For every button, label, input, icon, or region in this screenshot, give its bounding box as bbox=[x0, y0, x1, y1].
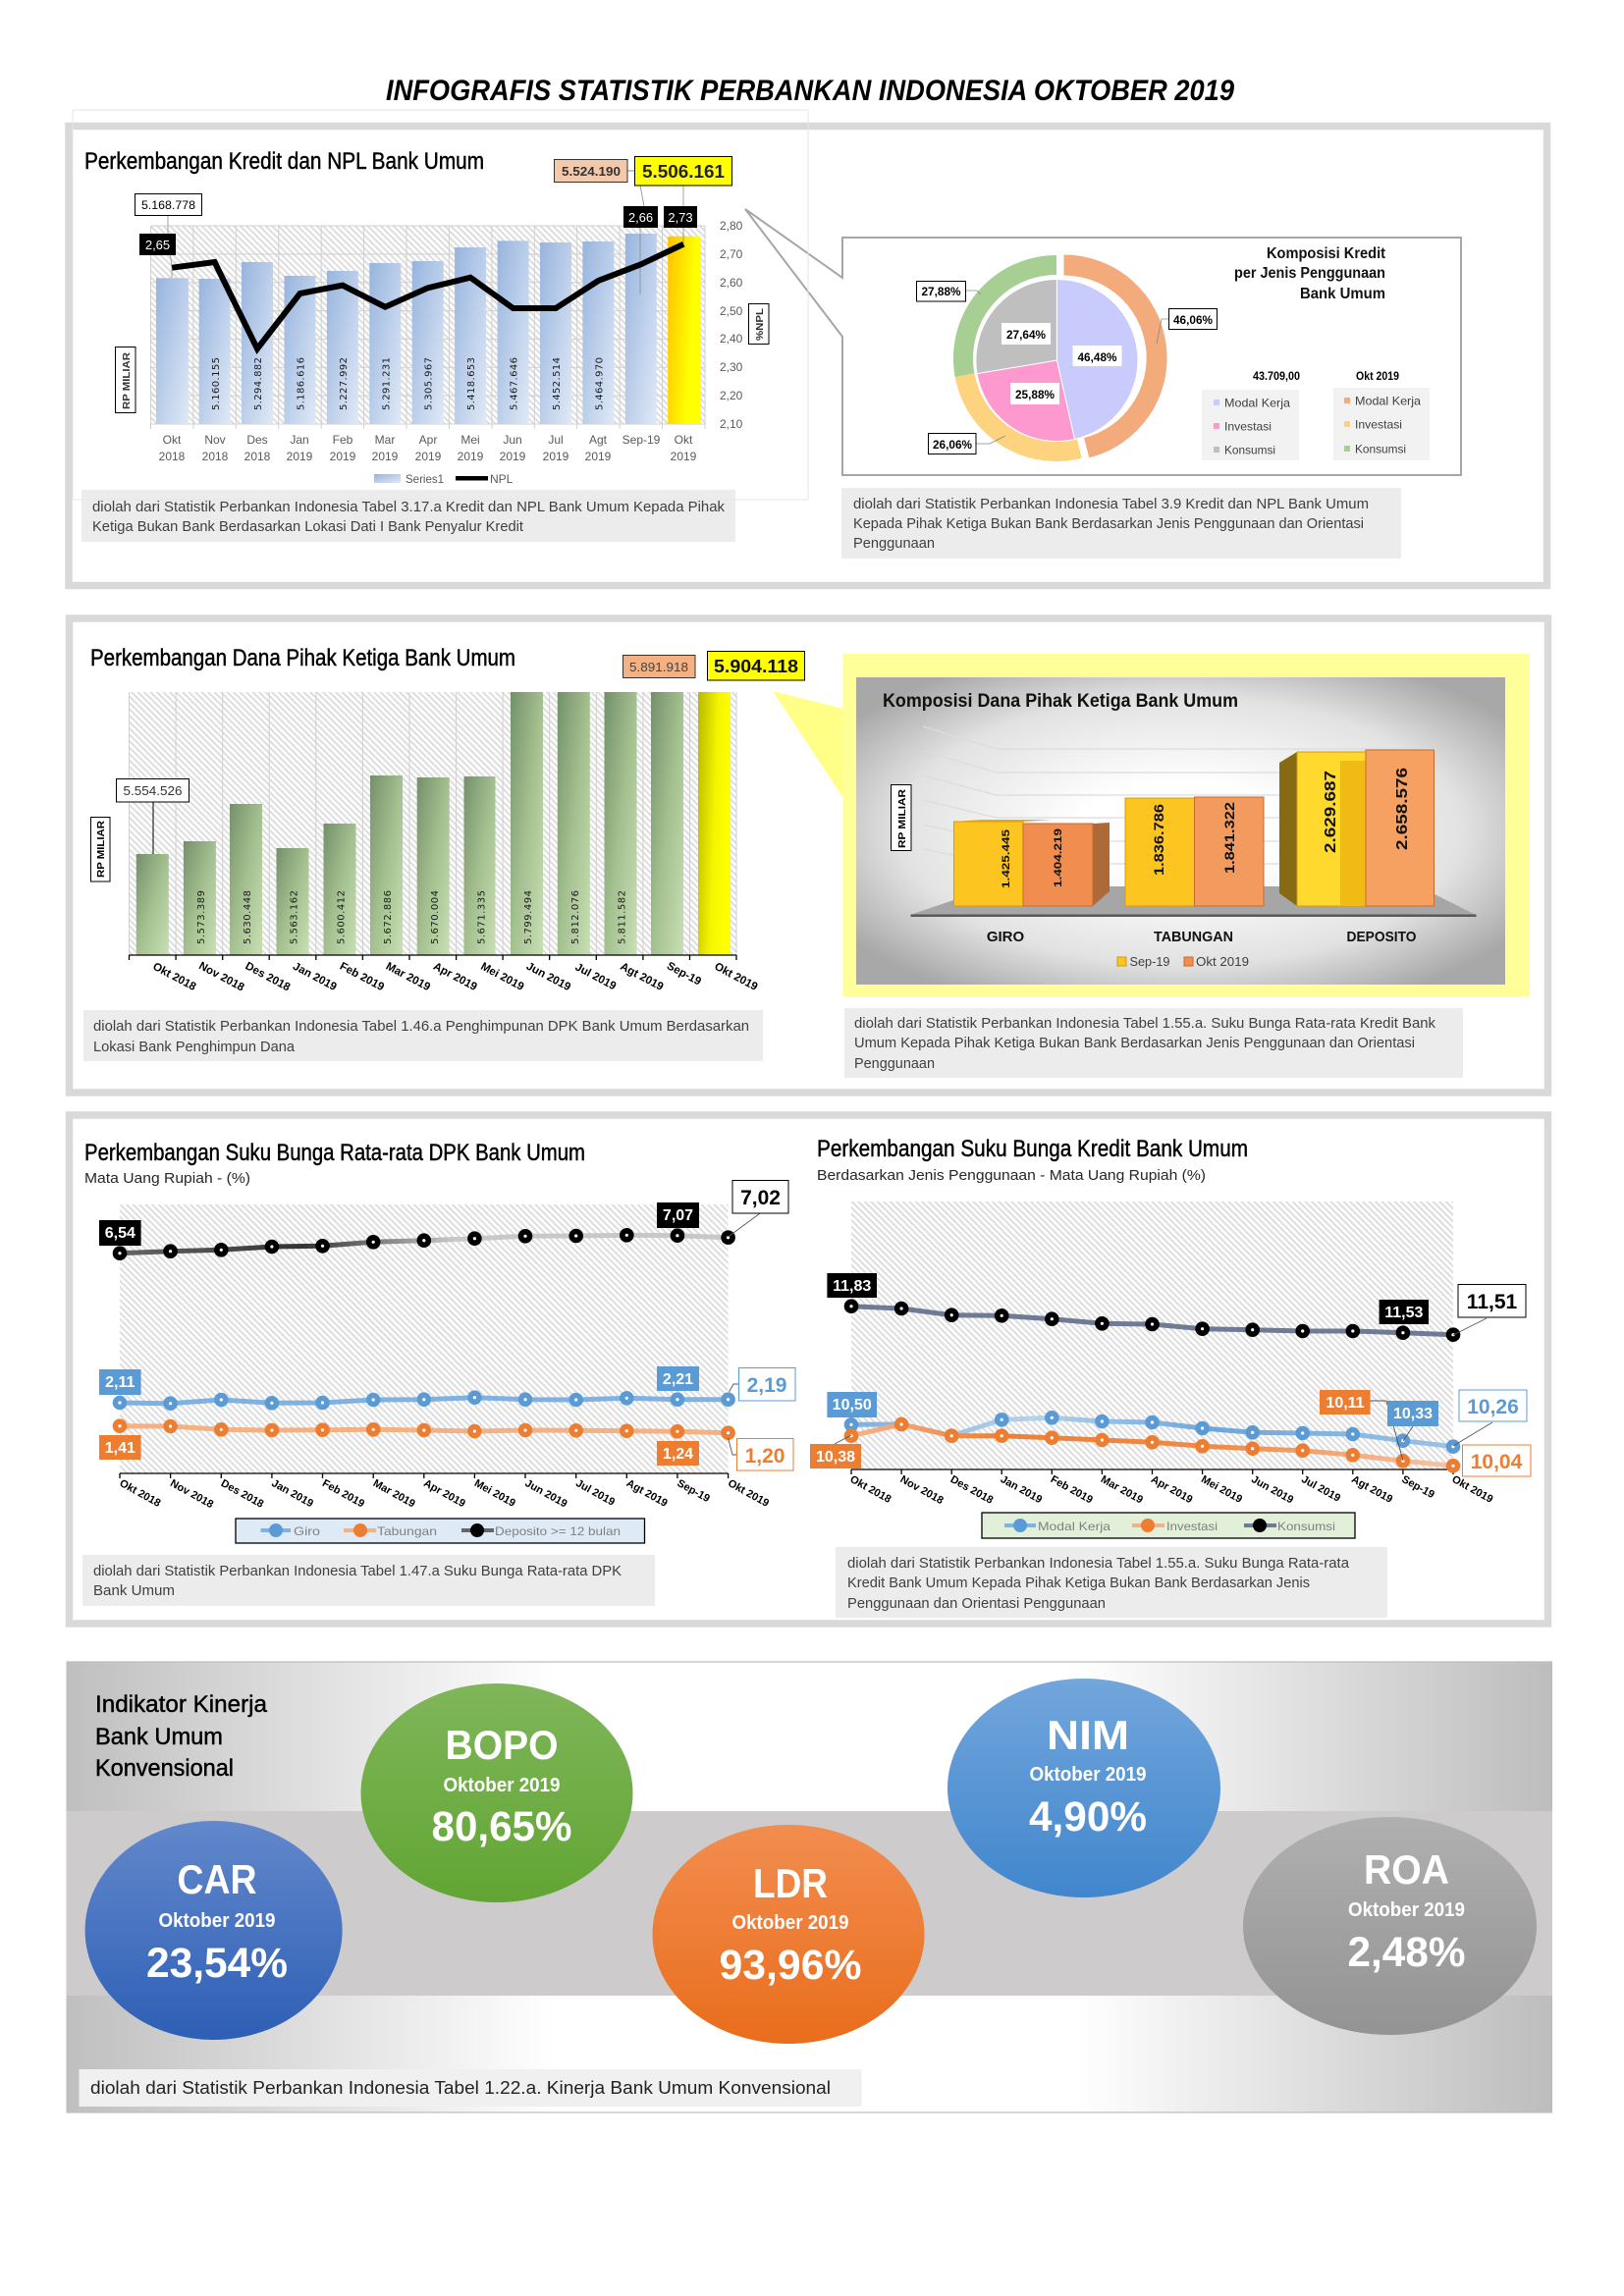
donut chart: komposisi kredit: 27,88% bbox=[921, 285, 961, 298]
axis labels: 2,10 bbox=[720, 417, 743, 431]
month labels: 2018 bbox=[202, 450, 229, 463]
caption bbox=[836, 1547, 1387, 1618]
callouts: values: %NPL bbox=[754, 307, 766, 341]
indicator: NIM: Oktober 2019 bbox=[1029, 1764, 1147, 1786]
chart: kredit bars and NPL line: 5.291.231 bbox=[381, 357, 392, 410]
month labels: Des 2018 bbox=[219, 1477, 265, 1511]
month labels: Okt 2019 bbox=[712, 961, 759, 993]
indicator: LDR: 93,96% bbox=[719, 1942, 862, 1989]
month labels: Jan 2019 bbox=[291, 961, 339, 993]
month labels: Nov 2018 bbox=[196, 960, 246, 994]
caption: diolah dari Statistik Perbankan Indonesia Tabel 1.55.a. Suku Bunga Rata-rata Kredit Bank bbox=[854, 1015, 1435, 1032]
panel: komposisi DPK bbox=[842, 654, 1530, 996]
panel: indikator kinerja bbox=[67, 1662, 1552, 2112]
caption bbox=[83, 1010, 763, 1061]
caption: Lokasi Bank Penghimpun Dana bbox=[93, 1039, 296, 1055]
month labels: Mei 2019 bbox=[1199, 1473, 1244, 1506]
axis labels: 2,40 bbox=[720, 332, 743, 346]
axis labels: 2,30 bbox=[720, 360, 743, 374]
indicator: ROA bbox=[1243, 1817, 1537, 2035]
donut chart: komposisi kredit bbox=[917, 254, 1218, 461]
yellow callout arrow bbox=[773, 691, 843, 798]
axis labels: 2,70 bbox=[720, 247, 743, 261]
month labels: Agt 2019 bbox=[618, 961, 665, 993]
axis labels bbox=[720, 219, 743, 431]
callouts: values: 2,73 bbox=[668, 210, 693, 225]
indicator: CAR bbox=[85, 1821, 343, 2040]
heading: kredit dan NPL: Perkembangan Kredit dan NPL Bank Umum bbox=[84, 148, 484, 175]
axis labels: 2,20 bbox=[720, 389, 743, 402]
3D bar chart: 2.629.687 bbox=[1323, 771, 1339, 853]
caption: diolah dari Statistik Perbankan Indonesia Tabel 1.47.a Suku Bunga Rata-rata DPK bbox=[93, 1563, 622, 1579]
month labels: Feb 2019 bbox=[338, 960, 386, 993]
legend: Series1 bbox=[406, 472, 444, 486]
caption: Ketiga Bukan Bank Berdasarkan Lokasi Dati I Bank Penyalur Kredit bbox=[92, 518, 524, 535]
3D bar chart: 1.841.322 bbox=[1222, 802, 1237, 874]
3D bar chart: DEPOSITO bbox=[1347, 929, 1417, 945]
bar chart: DPK: RP MILIAR bbox=[95, 821, 107, 878]
month labels: Sep-19 bbox=[665, 960, 703, 988]
caption bbox=[844, 1008, 1463, 1078]
month labels: Okt 2018 bbox=[848, 1473, 893, 1506]
indicator: NIM: 4,90% bbox=[1029, 1793, 1147, 1841]
3D bar chart: TABUNGAN bbox=[1154, 929, 1233, 945]
caption: diolah dari Statistik Perbankan Indonesia Tabel 1.55.a. Suku Bunga Rata-rata bbox=[847, 1555, 1350, 1572]
legend: 43.709,00: 43.709,00 bbox=[1253, 369, 1300, 383]
month labels bbox=[118, 1477, 771, 1511]
heading: indikator: Konvensional bbox=[95, 1755, 234, 1782]
month labels: Agt 2019 bbox=[624, 1477, 670, 1510]
legend: 43.709,00: Konsumsi bbox=[1224, 444, 1275, 457]
line chart: suku bunga kredit: 10,33 bbox=[1393, 1406, 1433, 1422]
bar chart: DPK: 5.670.004 bbox=[430, 890, 441, 944]
donut chart: komposisi kredit: 27,64% bbox=[1006, 328, 1046, 342]
legend bbox=[374, 472, 514, 486]
month labels: Mar 2019 bbox=[384, 960, 432, 993]
indicator: NIM: NIM bbox=[1047, 1712, 1129, 1758]
chart: kredit bars and NPL line: 5.227.992 bbox=[339, 357, 350, 410]
caption: Kepada Pihak Ketiga Bukan Bank Berdasarkan Jenis Penggunaan dan Orientasi bbox=[853, 515, 1364, 532]
month labels: Jun 2019 bbox=[524, 960, 572, 993]
month labels: 2019 bbox=[585, 450, 612, 463]
month labels: 2019 bbox=[415, 450, 442, 463]
chart: kredit bars and NPL line: 5.305.967 bbox=[424, 357, 435, 410]
panel: dana pihak ketiga bbox=[69, 618, 1547, 1093]
subheading: Berdasarkan Jenis Penggunaan - Mata Uang Rupiah (%) bbox=[817, 1167, 1206, 1184]
indicator: CAR: 23,54% bbox=[146, 1940, 288, 1987]
month labels: Mei 2019 bbox=[472, 1477, 517, 1510]
line chart: suku bunga DPK: 2,11 bbox=[105, 1374, 135, 1391]
indicator: BOPO: Oktober 2019 bbox=[444, 1775, 560, 1796]
month labels: Agt 2019 bbox=[1349, 1473, 1394, 1506]
heading: indikator: Bank Umum bbox=[95, 1724, 223, 1750]
line chart: suku bunga kredit: 10,26 bbox=[1467, 1396, 1519, 1418]
legend: suku bunga DPK: Deposito >= 12 bulan bbox=[495, 1524, 621, 1538]
chart: kredit bars and NPL line: 5.452.514 bbox=[552, 357, 563, 410]
chart: kredit bars and NPL line: 5.464.970 bbox=[594, 357, 605, 410]
month labels: 2019 bbox=[287, 450, 313, 463]
bar chart: DPK: 5.630.448 bbox=[243, 890, 253, 944]
indicator: BOPO: BOPO bbox=[446, 1722, 558, 1768]
month labels: Okt bbox=[675, 433, 693, 447]
indicator: LDR: LDR bbox=[753, 1860, 828, 1906]
legend: suku bunga DPK: Giro bbox=[294, 1524, 320, 1538]
caption bbox=[841, 488, 1401, 559]
chart: kredit bars and NPL line: 5.160.155 bbox=[211, 357, 222, 410]
month labels: Feb bbox=[333, 433, 353, 447]
value callouts bbox=[623, 652, 805, 680]
legend: NPL bbox=[490, 472, 514, 486]
line chart: suku bunga kredit: 11,51 bbox=[1467, 1291, 1518, 1313]
line chart: suku bunga DPK: 1,24 bbox=[663, 1446, 693, 1463]
month labels: Apr 2019 bbox=[1149, 1473, 1195, 1506]
legend: okt 2019: Investasi bbox=[1355, 418, 1402, 432]
bar chart: DPK: 5.563.162 bbox=[289, 890, 300, 944]
indicator: CAR: Oktober 2019 bbox=[159, 1910, 275, 1932]
heading: indikator bbox=[95, 1691, 267, 1782]
month labels: Apr 2019 bbox=[421, 1477, 467, 1510]
line chart: suku bunga kredit: 10,04 bbox=[1471, 1451, 1523, 1473]
month labels: Jul 2019 bbox=[573, 1477, 617, 1509]
chart: kredit bars and NPL line: 5.294.882 bbox=[253, 357, 264, 410]
heading: indikator: Indikator Kinerja bbox=[95, 1691, 267, 1718]
month labels: Jan 2019 bbox=[269, 1477, 315, 1510]
heading: dana pihak ketiga: Perkembangan Dana Pihak Ketiga Bank Umum bbox=[90, 645, 515, 671]
month labels: Okt bbox=[163, 433, 182, 447]
callout frame: komposisi kredit bbox=[745, 209, 1461, 475]
month labels: Okt 2019 bbox=[726, 1477, 771, 1510]
chart: kredit bars and NPL line: 5.467.646 bbox=[510, 357, 520, 410]
legend: okt 2019: Konsumsi bbox=[1355, 442, 1406, 455]
month labels bbox=[150, 960, 759, 994]
donut chart: komposisi kredit: 46,06% bbox=[1173, 313, 1213, 327]
line chart: suku bunga kredit: 10,11 bbox=[1326, 1395, 1365, 1412]
month labels: Jun bbox=[503, 433, 522, 447]
legend: okt 2019: Modal Kerja bbox=[1355, 395, 1421, 408]
legend: okt 2019: Okt 2019 bbox=[1356, 369, 1399, 383]
3D bar chart: GIRO bbox=[987, 929, 1024, 945]
month labels: 2019 bbox=[543, 450, 569, 463]
caption: diolah dari Statistik Perbankan Indonesia Tabel 1.46.a Penghimpunan DPK Bank Umum Berdasarkan bbox=[93, 1018, 749, 1035]
3D bar chart: 2.658.576 bbox=[1394, 768, 1411, 850]
panel: kredit dan NPL bbox=[69, 110, 1547, 585]
legend: suku bunga kredit: Modal Kerja bbox=[1038, 1520, 1110, 1533]
bar chart: DPK bbox=[90, 692, 759, 994]
line chart: suku bunga DPK: 7,02 bbox=[740, 1187, 781, 1209]
legend: suku bunga DPK bbox=[236, 1519, 644, 1543]
subheading: Mata Uang Rupiah - (%) bbox=[84, 1170, 250, 1187]
caption: Kredit Bank Umum Kepada Pihak Ketiga Bukan Bank Berdasarkan Jenis bbox=[847, 1575, 1310, 1591]
month labels: Sep-19 bbox=[623, 433, 661, 447]
3D bar chart bbox=[892, 726, 1477, 945]
caption: Penggunaan bbox=[854, 1055, 935, 1072]
callouts: values bbox=[116, 157, 769, 412]
heading: suku bunga DPK: Perkembangan Suku Bunga Rata-rata DPK Bank Umum bbox=[84, 1140, 585, 1166]
line chart: suku bunga DPK: 1,41 bbox=[105, 1440, 135, 1457]
3D bar chart: 1.404.219 bbox=[1053, 828, 1064, 887]
line chart: suku bunga kredit bbox=[810, 1201, 1531, 1507]
month labels: Apr bbox=[419, 433, 437, 447]
caption: Penggunaan dan Orientasi Penggunaan bbox=[847, 1595, 1106, 1612]
legend: 43.709,00 bbox=[1202, 369, 1300, 460]
month labels: Feb 2019 bbox=[320, 1477, 366, 1510]
month labels: 2019 bbox=[458, 450, 484, 463]
legend: suku bunga DPK: Tabungan bbox=[377, 1524, 437, 1538]
month labels: Apr 2019 bbox=[431, 961, 479, 993]
caption bbox=[81, 490, 735, 542]
month labels: Nov 2018 bbox=[898, 1473, 946, 1507]
legend: Okt 2019 bbox=[1196, 954, 1249, 969]
caption: diolah dari Statistik Perbankan Indonesia Tabel 1.22.a. Kinerja Bank Umum Konvensional bbox=[90, 2078, 831, 2098]
month labels: Mar 2019 bbox=[371, 1477, 417, 1510]
heading: komposisi kredit: Komposisi Kredit bbox=[1267, 245, 1385, 262]
month labels bbox=[159, 433, 697, 463]
callouts: values: 5.524.190 bbox=[562, 165, 621, 179]
month labels: Sep-19 bbox=[1399, 1473, 1436, 1501]
line chart: suku bunga DPK: 7,07 bbox=[663, 1207, 693, 1224]
line chart: suku bunga kredit: 11,53 bbox=[1384, 1305, 1423, 1321]
line chart: suku bunga DPK: 6,54 bbox=[105, 1225, 135, 1242]
indicator: LDR bbox=[652, 1825, 925, 2044]
legend bbox=[1117, 954, 1249, 969]
panel: suku bunga bbox=[69, 1115, 1547, 1624]
month labels: Jul 2019 bbox=[573, 961, 618, 992]
heading: suku bunga kredit: Perkembangan Suku Bunga Kredit Bank Umum bbox=[817, 1136, 1248, 1162]
caption: diolah dari Statistik Perbankan Indonesia Tabel 3.17.a Kredit dan NPL Bank Umum Kepada Pihak bbox=[92, 499, 725, 515]
indicator: CAR: CAR bbox=[177, 1856, 257, 1902]
bar chart: DPK: 5.554.526 bbox=[124, 784, 183, 798]
indicator: ROA: ROA bbox=[1364, 1846, 1449, 1893]
caption bbox=[79, 2069, 862, 2107]
caption bbox=[82, 1555, 655, 1606]
month labels: Okt 2018 bbox=[150, 961, 198, 993]
chart: kredit bars and NPL line: 5.186.616 bbox=[297, 357, 306, 410]
axis labels: 2,50 bbox=[720, 304, 743, 318]
indicator: ROA: Oktober 2019 bbox=[1348, 1899, 1465, 1921]
month labels: Sep-19 bbox=[675, 1477, 712, 1505]
donut chart: komposisi kredit: 26,06% bbox=[933, 438, 972, 452]
indicator: BOPO: 80,65% bbox=[432, 1803, 571, 1850]
month labels: 2019 bbox=[500, 450, 526, 463]
line chart: suku bunga DPK bbox=[99, 1180, 795, 1511]
month labels: Des 2018 bbox=[244, 960, 293, 994]
line chart: suku bunga kredit: 11,83 bbox=[833, 1278, 871, 1295]
heading: komposisi kredit: per Jenis Penggunaan bbox=[1234, 265, 1385, 282]
month labels: Des 2018 bbox=[948, 1473, 995, 1507]
month labels: 2019 bbox=[330, 450, 356, 463]
month labels: Mar 2019 bbox=[1099, 1473, 1145, 1506]
month labels: 2019 bbox=[671, 450, 697, 463]
bar chart: DPK: 5.799.494 bbox=[523, 890, 534, 944]
line chart: suku bunga DPK: 2,21 bbox=[663, 1371, 693, 1388]
line chart: suku bunga kredit: 10,50 bbox=[833, 1397, 872, 1414]
month labels: Jun 2019 bbox=[1249, 1473, 1295, 1506]
callouts: values: 5.168.778 bbox=[141, 198, 195, 212]
3D bar chart: 1.425.445 bbox=[1001, 829, 1012, 888]
month labels: Agt bbox=[589, 433, 608, 447]
legend: suku bunga kredit bbox=[982, 1513, 1355, 1538]
bar chart: DPK: 5.812.076 bbox=[570, 890, 581, 944]
donut chart: komposisi kredit: 46,48% bbox=[1078, 350, 1117, 364]
axis labels: 2,60 bbox=[720, 276, 743, 290]
month labels: Nov 2018 bbox=[168, 1477, 215, 1511]
axis labels: 2,80 bbox=[720, 219, 743, 233]
bar chart: DPK: 5.671.335 bbox=[477, 890, 487, 944]
month labels: Jul bbox=[548, 433, 564, 447]
month labels: Jul 2019 bbox=[1299, 1473, 1342, 1505]
line chart: suku bunga DPK: 2,19 bbox=[747, 1374, 786, 1397]
callouts: values: 5.506.161 bbox=[642, 162, 725, 182]
month labels: Mar bbox=[375, 433, 395, 447]
3D bar chart: RP MILIAR bbox=[896, 789, 908, 848]
indicator: BOPO bbox=[361, 1683, 632, 1902]
bar chart: DPK: 5.600.412 bbox=[336, 890, 348, 944]
legend: suku bunga kredit: Konsumsi bbox=[1277, 1520, 1335, 1533]
3D bar chart: 1.836.786 bbox=[1152, 803, 1166, 876]
indicator: NIM bbox=[947, 1679, 1220, 1897]
value callouts: 5.904.118 bbox=[714, 657, 798, 676]
callouts: values: RP MILIAR bbox=[121, 352, 133, 409]
month labels: Jan 2019 bbox=[999, 1473, 1044, 1506]
month labels: Feb 2019 bbox=[1049, 1473, 1095, 1506]
indicator: LDR: Oktober 2019 bbox=[732, 1912, 848, 1934]
month labels: Mei 2019 bbox=[478, 961, 525, 993]
legend: suku bunga kredit: Investasi bbox=[1166, 1520, 1218, 1533]
bar chart: DPK: 5.811.582 bbox=[617, 890, 628, 944]
bar chart: DPK: 5.573.389 bbox=[196, 890, 207, 944]
month labels: Okt 2018 bbox=[118, 1477, 162, 1510]
donut chart: komposisi kredit: 25,88% bbox=[1015, 388, 1055, 401]
month labels: Mei bbox=[460, 433, 480, 447]
month labels: 2018 bbox=[244, 450, 271, 463]
indicator: ROA: 2,48% bbox=[1347, 1929, 1465, 1976]
month labels: Jun 2019 bbox=[523, 1477, 569, 1510]
month labels bbox=[848, 1473, 1494, 1507]
month labels: 2019 bbox=[372, 450, 399, 463]
caption: Umum Kepada Pihak Ketiga Bukan Bank Berdasarkan Jenis Penggunaan dan Orientasi bbox=[854, 1035, 1415, 1051]
caption: Penggunaan bbox=[853, 535, 935, 552]
legend: 43.709,00: Investasi bbox=[1224, 420, 1272, 434]
heading: komposisi kredit bbox=[1234, 245, 1385, 302]
bar chart: DPK: 5.672.886 bbox=[383, 890, 394, 944]
value callouts: 5.891.918 bbox=[629, 661, 688, 674]
caption: diolah dari Statistik Perbankan Indonesia Tabel 3.9 Kredit dan NPL Bank Umum bbox=[853, 496, 1369, 512]
legend: Sep-19 bbox=[1129, 954, 1170, 969]
month labels: 2018 bbox=[159, 450, 186, 463]
month labels: Okt 2019 bbox=[1450, 1473, 1494, 1506]
caption: Bank Umum bbox=[93, 1582, 175, 1599]
chart: kredit bars and NPL line bbox=[151, 186, 743, 486]
chart frame outline bbox=[73, 110, 808, 500]
title: INFOGRAFIS STATISTIK PERBANKAN INDONESIA OKTOBER 2019 bbox=[386, 75, 1234, 107]
heading: komposisi kredit: Bank Umum bbox=[1300, 286, 1385, 302]
chart: kredit bars and NPL line: 5.418.653 bbox=[466, 357, 477, 410]
callouts: values: 2,65 bbox=[145, 238, 170, 252]
month labels: Nov bbox=[204, 433, 226, 447]
callouts: values: 2,66 bbox=[628, 210, 653, 225]
line chart: suku bunga kredit: 10,38 bbox=[816, 1449, 855, 1466]
legend: 43.709,00: Modal Kerja bbox=[1224, 397, 1290, 410]
heading: komposisi DPK: Komposisi Dana Pihak Ketiga Bank Umum bbox=[883, 691, 1238, 712]
line chart: suku bunga DPK: 1,20 bbox=[745, 1445, 785, 1468]
legend: okt 2019 bbox=[1333, 369, 1430, 460]
month labels: Des bbox=[246, 433, 268, 447]
month labels: Jan bbox=[290, 433, 309, 447]
